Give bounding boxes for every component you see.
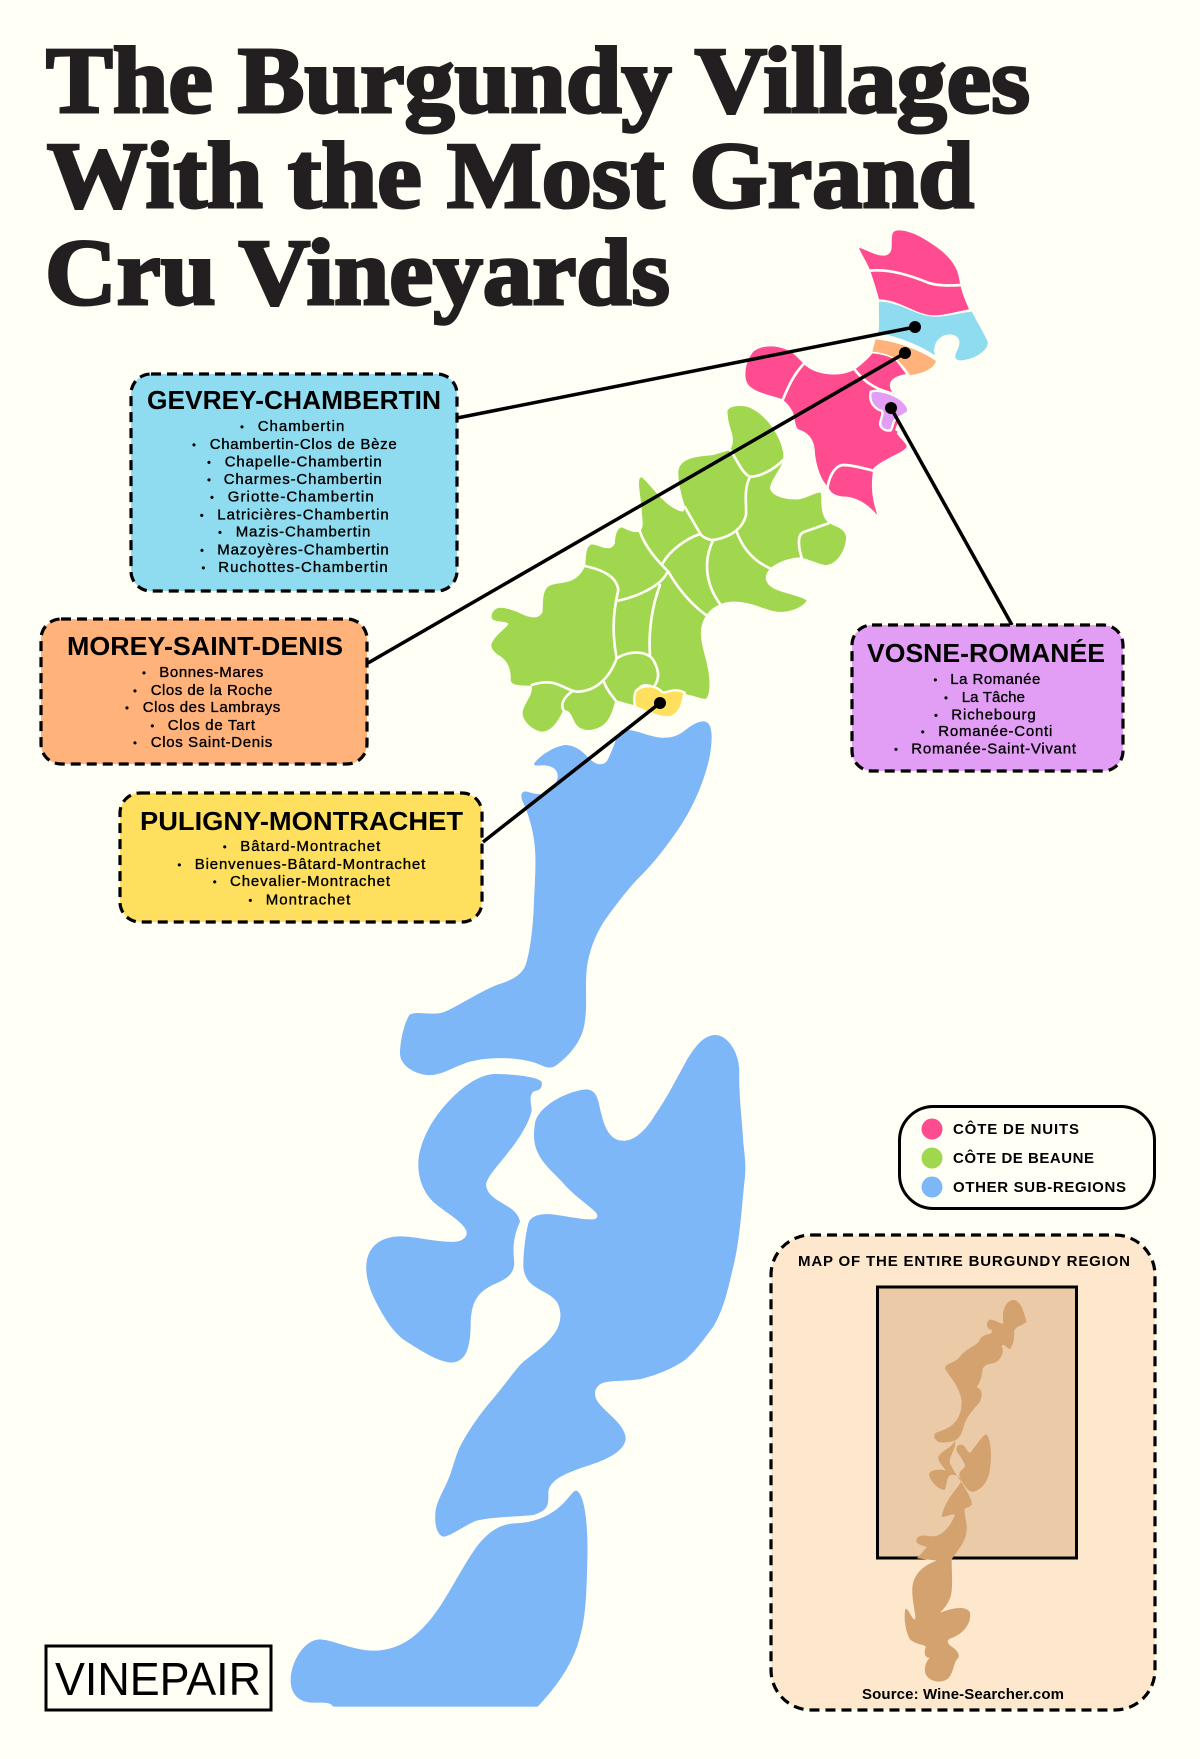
source note: Source: Wine-Searcher.com: [862, 1686, 1064, 1703]
list: Vosne-Romanee vineyards: Romanée-Conti: [938, 723, 1052, 740]
leader line: Vosne-Romanee: [885, 402, 1012, 625]
list: Vosne-Romanee vineyards: •: [934, 708, 938, 722]
list: Puligny-Montrachet vineyards: Montrachet: [266, 891, 351, 908]
list: Gevrey-Chambertin vineyards: Griotte-Chambertin: [228, 489, 374, 506]
panel: Gevrey-Chambertin: [131, 374, 457, 591]
list: Gevrey-Chambertin vineyards: •: [201, 561, 205, 575]
list: Morey-Saint-Denis vineyards: •: [133, 736, 137, 750]
map of Burgundy sub-regions: [291, 230, 988, 1707]
list: Vosne-Romanee vineyards: •: [944, 691, 948, 705]
list: Vosne-Romanee vineyards: La Romanée: [950, 671, 1040, 688]
legend item: Cote de Beaune: CÔTE DE BEAUNE: [953, 1149, 1094, 1167]
list: Gevrey-Chambertin vineyards: •: [192, 438, 196, 452]
region: other sub-regions south block: [291, 1491, 588, 1707]
list: Gevrey-Chambertin vineyards: •: [210, 491, 214, 505]
legend item: other sub-regions: OTHER SUB-REGIONS: [953, 1179, 1126, 1196]
region: lower Cote de Nuits: [745, 346, 910, 515]
list: Morey-Saint-Denis vineyards: Clos de la Roche: [151, 682, 272, 699]
legend item: Cote de Beaune: [922, 1148, 1094, 1168]
region: Gevrey-Chambertin: [878, 302, 988, 360]
list: Puligny-Montrachet vineyards: Chevalier-Montrachet: [230, 873, 391, 890]
heading: Puligny-Montrachet: PULIGNY-MONTRACHET: [140, 806, 463, 836]
legend: [900, 1106, 1154, 1208]
region: Morey-Saint-Denis: [872, 339, 936, 375]
heading: Morey-Saint-Denis: MOREY-SAINT-DENIS: [67, 631, 343, 661]
list: Gevrey-Chambertin vineyards: •: [200, 508, 204, 522]
list: Gevrey-Chambertin vineyards: •: [207, 473, 211, 487]
list: Morey-Saint-Denis vineyards: •: [125, 701, 129, 715]
region: other sub-regions north block: [400, 721, 712, 1075]
list: Vosne-Romanee vineyards: •: [894, 743, 898, 757]
list: Vosne-Romanee vineyards: [894, 671, 1077, 758]
list: Puligny-Montrachet vineyards: [177, 838, 426, 908]
region: other sub-regions central block: [435, 1035, 745, 1537]
leader line: Gevrey-Chambertin: [457, 321, 921, 418]
panel heading: MAP OF THE ENTIRE BURGUNDY REGION: [798, 1253, 1130, 1270]
list: Morey-Saint-Denis vineyards: Clos de Tart: [168, 717, 256, 734]
list: Morey-Saint-Denis vineyards: •: [142, 666, 146, 680]
panel: Puligny-Montrachet: [120, 793, 482, 922]
region: Puligny-Montrachet: [635, 687, 683, 716]
list: Gevrey-Chambertin vineyards: [192, 418, 397, 576]
list: Gevrey-Chambertin vineyards: •: [218, 526, 222, 540]
leader line: Puligny-Montrachet: [483, 697, 666, 842]
list: Gevrey-Chambertin vineyards: Chapelle-Chambertin: [225, 453, 382, 470]
list: Morey-Saint-Denis vineyards: [125, 664, 280, 751]
region: Cote de Beaune: [491, 406, 846, 732]
legend item: other sub-regions: [922, 1176, 1126, 1198]
logo: VinePair: VINEPAIR: [55, 1653, 261, 1705]
panel: map of the entire Burgundy region: [771, 1235, 1155, 1710]
legend item: Cote de Nuits: CÔTE DE NUITS: [953, 1120, 1079, 1138]
title: The Burgundy Villages: [46, 29, 1030, 133]
list: Gevrey-Chambertin vineyards: •: [200, 543, 204, 557]
list: Morey-Saint-Denis vineyards: Clos Saint-Denis: [151, 734, 272, 751]
title: With the Most Grand: [47, 124, 974, 228]
mini map silhouette: [905, 1300, 1027, 1682]
list: Puligny-Montrachet vineyards: •: [177, 858, 181, 872]
list: Gevrey-Chambertin vineyards: Charmes-Chambertin: [224, 471, 382, 488]
leader line: Morey-Saint-Denis: [368, 347, 911, 663]
list: Morey-Saint-Denis vineyards: •: [133, 684, 137, 698]
region: Vosne-Romanee: [871, 392, 907, 429]
list: Morey-Saint-Denis vineyards: •: [150, 719, 154, 733]
region: upper Cote de Nuits: [859, 230, 969, 315]
panel: Vosne-Romanee: [852, 625, 1123, 771]
heading: Gevrey-Chambertin: GEVREY-CHAMBERTIN: [147, 385, 441, 415]
list: Vosne-Romanee vineyards: Richebourg: [951, 706, 1036, 723]
list: Puligny-Montrachet vineyards: Bienvenues-Bâtard-Montrachet: [195, 856, 426, 873]
list: Gevrey-Chambertin vineyards: •: [207, 455, 211, 469]
list: Gevrey-Chambertin vineyards: Mazis-Chambertin: [236, 524, 370, 540]
list: Gevrey-Chambertin vineyards: •: [240, 420, 244, 434]
inset rectangle: [878, 1287, 1076, 1558]
list: Gevrey-Chambertin vineyards: Chambertin-Clos de Bèze: [210, 436, 397, 453]
list: Puligny-Montrachet vineyards: •: [223, 840, 227, 854]
list: Gevrey-Chambertin vineyards: Latricières-Chambertin: [217, 506, 389, 524]
title: Cru Vineyards: [45, 221, 670, 325]
map: Cote de Nuits and village areas: [745, 230, 988, 515]
list: Puligny-Montrachet vineyards: •: [213, 875, 217, 889]
map: Cote de Beaune: [491, 406, 846, 732]
heading: Vosne-Romanee: VOSNE-ROMANÉE: [867, 638, 1105, 668]
legend item: Cote de Nuits: [922, 1118, 1079, 1140]
list: Vosne-Romanee vineyards: La Tâche: [962, 689, 1025, 706]
panel: Morey-Saint-Denis: [41, 619, 367, 764]
title: [45, 29, 1030, 325]
list: Vosne-Romanee vineyards: •: [921, 725, 925, 739]
list: Vosne-Romanee vineyards: •: [933, 673, 937, 687]
list: Gevrey-Chambertin vineyards: Mazoyères-Chambertin: [217, 541, 389, 558]
list: Morey-Saint-Denis vineyards: Clos des Lambrays: [143, 699, 280, 716]
list: Gevrey-Chambertin vineyards: Ruchottes-Chambertin: [218, 559, 388, 576]
region: other sub-regions west block: [366, 1074, 542, 1363]
list: Puligny-Montrachet vineyards: Bâtard-Montrachet: [240, 838, 381, 855]
list: Gevrey-Chambertin vineyards: Chambertin: [258, 418, 344, 435]
list: Morey-Saint-Denis vineyards: Bonnes-Mares: [159, 664, 263, 681]
list: Vosne-Romanee vineyards: Romanée-Saint-Vivant: [911, 741, 1077, 758]
list: Puligny-Montrachet vineyards: •: [248, 893, 252, 907]
